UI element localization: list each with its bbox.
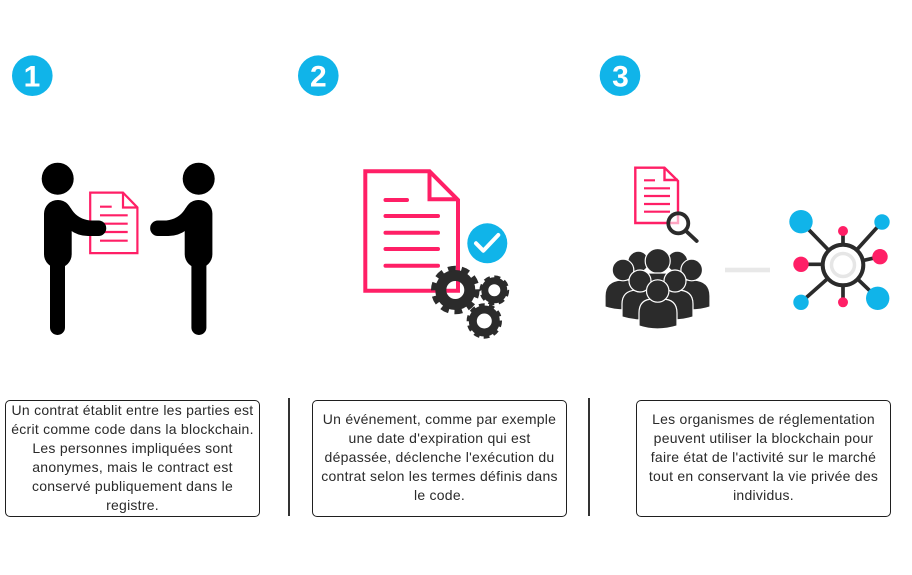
arrow: grey connector [725, 268, 770, 272]
icon: medium gear [468, 305, 500, 337]
text box: step 3: tout en conservant la vie privée des [649, 468, 878, 484]
text box: step 2: Un événement, comme par exemple [323, 411, 556, 427]
text box: step 3: peuvent utiliser la blockchain pour [654, 430, 873, 446]
icon: two people exchanging a contract [42, 163, 215, 335]
text box: step 2: le code. [414, 487, 465, 503]
text box: step 1: Un contrat établit entre les parties est [12, 402, 253, 418]
text box: step 2 [312, 400, 567, 517]
icon: document under magnifier [635, 168, 697, 241]
icon: crowd of people [605, 248, 710, 329]
step number 2 [298, 55, 339, 96]
text box: step 1: anonymes, mais le contract est [32, 459, 233, 475]
icon: magnifier [668, 213, 697, 241]
step number 1: 1 [24, 60, 40, 94]
text box: step 1: écrit comme code dans la blockchain. [11, 421, 254, 437]
text box: step 3: Les organismes de réglementation [652, 411, 875, 427]
text box: step 3: individus. [733, 487, 794, 503]
icon: small document [635, 168, 678, 223]
icon: right person [150, 163, 215, 335]
text box: step 2: contrat selon les termes définis dans [321, 468, 558, 484]
step number 1 [12, 55, 53, 96]
text box: step 3: faire état de l'activité sur le marché [651, 449, 876, 465]
icon: small gear [481, 277, 508, 304]
network hub ring [823, 245, 863, 285]
text box: step 1 [5, 400, 260, 517]
icon: contract document [90, 193, 137, 253]
text box: step 1: Les personnes impliquées sont [32, 440, 233, 456]
network nodes [789, 210, 890, 310]
icon: document with check mark and gears [365, 171, 508, 337]
step number 2: 2 [310, 60, 327, 94]
network spokes [801, 222, 882, 302]
step number 3: 3 [612, 60, 629, 94]
text box: step 3 [636, 400, 891, 517]
text box: step 2: dépassée, déclenche l'exécution du [325, 449, 554, 465]
icon: large document [365, 171, 458, 291]
text box: step 2: une date d'expiration qui est [349, 430, 530, 446]
icon: left person [42, 163, 106, 335]
text box: step 1: conservé publiquement dans le [32, 478, 233, 494]
icon: large gear [434, 268, 477, 312]
icon: network hub [789, 210, 890, 310]
icon: check badge [467, 223, 507, 263]
text box: step 1: registre. [106, 497, 159, 513]
step number 3 [600, 55, 640, 96]
